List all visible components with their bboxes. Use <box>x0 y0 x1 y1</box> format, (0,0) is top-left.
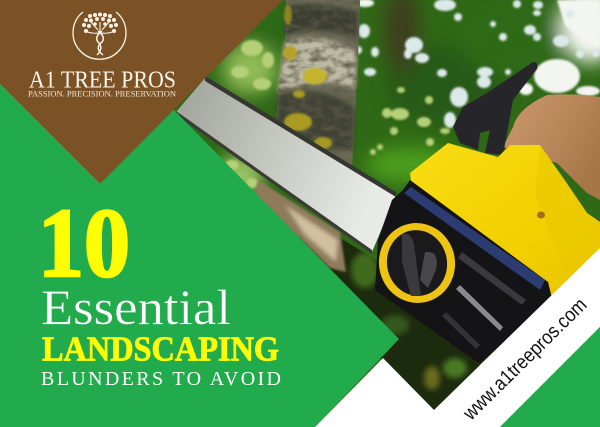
foliage background <box>170 0 600 427</box>
yellow dial <box>373 217 461 309</box>
sky gaps <box>356 0 600 96</box>
guide bar <box>176 76 396 254</box>
dark ground below saw <box>270 232 480 412</box>
brown logo panel <box>0 0 283 184</box>
green corner <box>500 327 600 427</box>
white diagonal band <box>315 248 600 427</box>
green panel <box>0 84 399 427</box>
hand <box>503 94 600 200</box>
Essential: Essential <box>41 279 231 335</box>
photo: chainsaw cutting a tree <box>170 0 600 427</box>
oil hole <box>537 212 545 218</box>
number 10: 10 <box>38 189 130 298</box>
headline <box>38 189 281 390</box>
BLUNDERS TO AVOID: BLUNDERS TO AVOID <box>41 368 281 390</box>
icon: tree in a circle <box>73 12 126 59</box>
logo <box>28 12 176 98</box>
tagline: PASSION. PRECISION. PRESERVATION <box>28 90 176 98</box>
saw body <box>373 143 600 364</box>
rear handle <box>453 62 538 155</box>
LANDSCAPING: LANDSCAPING <box>42 330 279 368</box>
lower trunk below the bar <box>255 180 346 272</box>
brand name: A1 TREE PROS <box>29 66 176 94</box>
tree trunk <box>276 0 360 170</box>
